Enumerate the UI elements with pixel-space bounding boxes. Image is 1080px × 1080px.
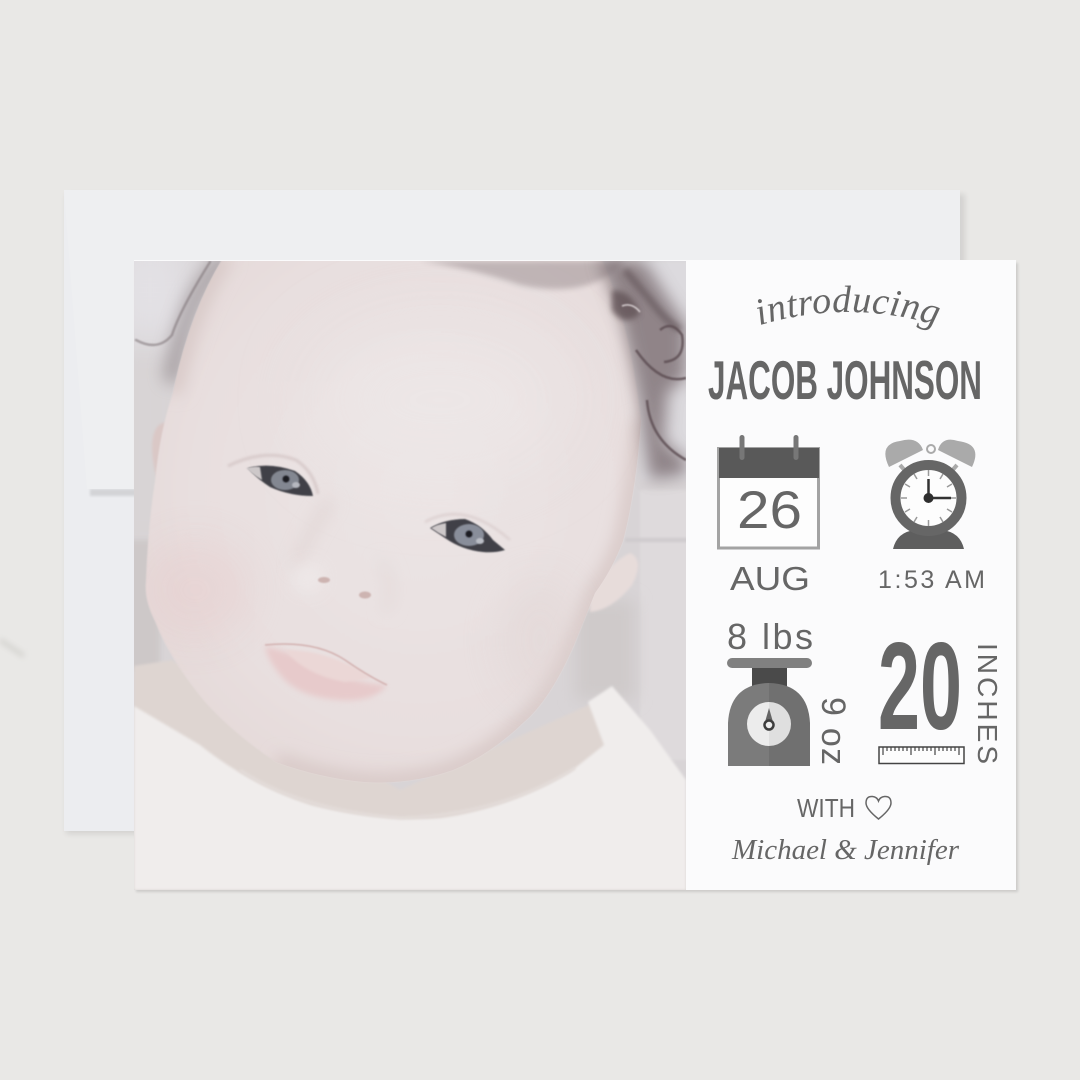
nose xyxy=(318,576,372,599)
right hair curls xyxy=(598,258,686,480)
month label: AUG xyxy=(730,560,810,597)
parents names: Michael & Jennifer xyxy=(731,834,960,866)
envelope xyxy=(64,190,965,834)
photo backdrop xyxy=(134,261,686,696)
time label: 1:53 AM xyxy=(878,566,985,594)
neck shadow and collar xyxy=(134,662,162,672)
ears xyxy=(152,422,638,612)
introducing: introducing xyxy=(757,286,940,330)
photo: baby xyxy=(110,240,700,890)
icon: calendar xyxy=(718,435,819,548)
top hair xyxy=(420,261,625,289)
card xyxy=(134,260,1018,892)
length number: 20 xyxy=(878,618,962,756)
calendar day number: 26 xyxy=(737,481,802,540)
icon: alarm clock xyxy=(885,440,975,549)
mouth xyxy=(265,644,387,700)
text panel xyxy=(708,286,1003,866)
ounces label: 9 oz xyxy=(814,697,852,765)
face xyxy=(140,255,641,782)
left hair xyxy=(136,262,222,375)
icon: baby scale xyxy=(727,658,812,766)
icon: heart xyxy=(866,796,891,819)
shirt xyxy=(134,686,686,890)
inches label: INCHES xyxy=(972,643,1003,764)
with label: WITH xyxy=(797,793,855,823)
right eye xyxy=(425,514,510,552)
left eye xyxy=(228,455,318,496)
pounds label: 8 lbs xyxy=(727,616,813,657)
icon: ruler xyxy=(879,747,964,764)
envelope flap xyxy=(64,190,960,496)
